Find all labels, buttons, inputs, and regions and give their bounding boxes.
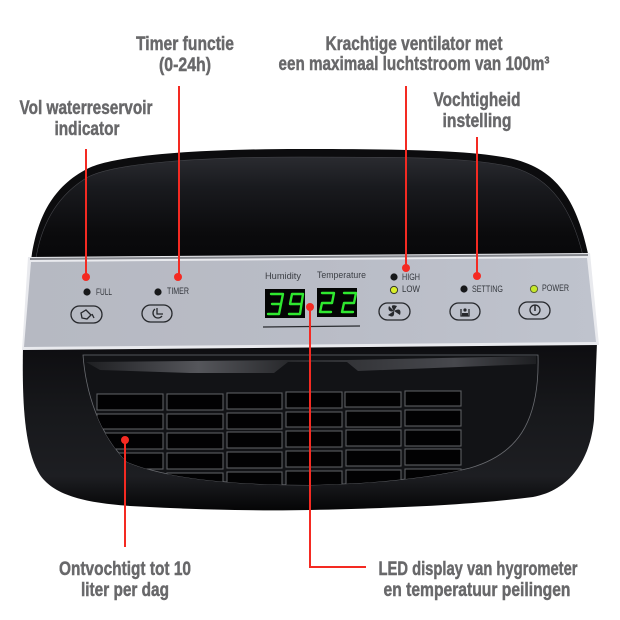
heading: powerful fan: Krachtige ventilator met (326, 34, 503, 55)
button: power (519, 302, 550, 319)
heading: timer function: Timer functie (136, 34, 234, 55)
indicator: high: HIGH (402, 272, 420, 282)
flap handle (86, 356, 536, 373)
air grille recess (83, 355, 538, 493)
heading: water tank full indicator: Vol waterreservoir (20, 98, 153, 119)
heading: LED display: en temperatuur peilingen (384, 580, 570, 601)
callout line: fan (402, 86, 410, 272)
LED display humidity 39 (265, 289, 305, 318)
LED display temperature 22 (317, 288, 357, 317)
heading: water tank full indicator: indicator (54, 119, 120, 140)
callout line: timer (174, 86, 182, 281)
indicator: setting: SETTING (472, 284, 503, 294)
device top cover (31, 149, 589, 260)
heading: dehumidifying capacity: liter per dag (81, 580, 169, 601)
indicator: timer: TIMER (167, 286, 189, 296)
indicator: power (530, 283, 569, 293)
panel labels: Humidity and Temperature: Temperature (317, 270, 366, 281)
button: fan (379, 303, 410, 320)
top cover gloss (36, 157, 583, 258)
indicator: full (83, 287, 112, 297)
heading: powerful fan: een maximaal luchtstroom van 100m³ (278, 54, 550, 75)
indicator: low (390, 284, 420, 294)
panel labels: Humidity and Temperature: Humidity (265, 271, 301, 282)
heading: timer function: (0-24h) (159, 55, 211, 76)
control panel (24, 258, 596, 347)
panel white edge (22, 253, 599, 350)
indicator: setting (460, 284, 503, 294)
button: timer (142, 305, 172, 322)
indicator: low: LOW (402, 284, 420, 294)
callout line: dehumidifying capacity (121, 436, 129, 547)
indicator: full: FULL (96, 287, 112, 297)
heading: dehumidifying capacity: Ontvochtigt tot 10 (59, 559, 191, 580)
heading: humidity setting: Vochtigheid (434, 90, 520, 111)
indicator: timer (154, 286, 189, 296)
indicator: high (390, 272, 420, 282)
panel labels: Humidity and Temperature (265, 270, 366, 282)
device lower body (23, 342, 597, 510)
grille vents (97, 391, 461, 493)
device: dehumidifier body (22, 149, 599, 510)
callout line: LED display (306, 303, 366, 567)
button: full water tank (71, 306, 102, 323)
callout line: full indicator (82, 149, 90, 281)
display underline (263, 326, 360, 327)
button: humidity setting (450, 303, 480, 320)
indicator: power: POWER (542, 283, 569, 293)
callout line: humidity setting (473, 137, 481, 280)
heading: humidity setting: instelling (442, 111, 512, 132)
